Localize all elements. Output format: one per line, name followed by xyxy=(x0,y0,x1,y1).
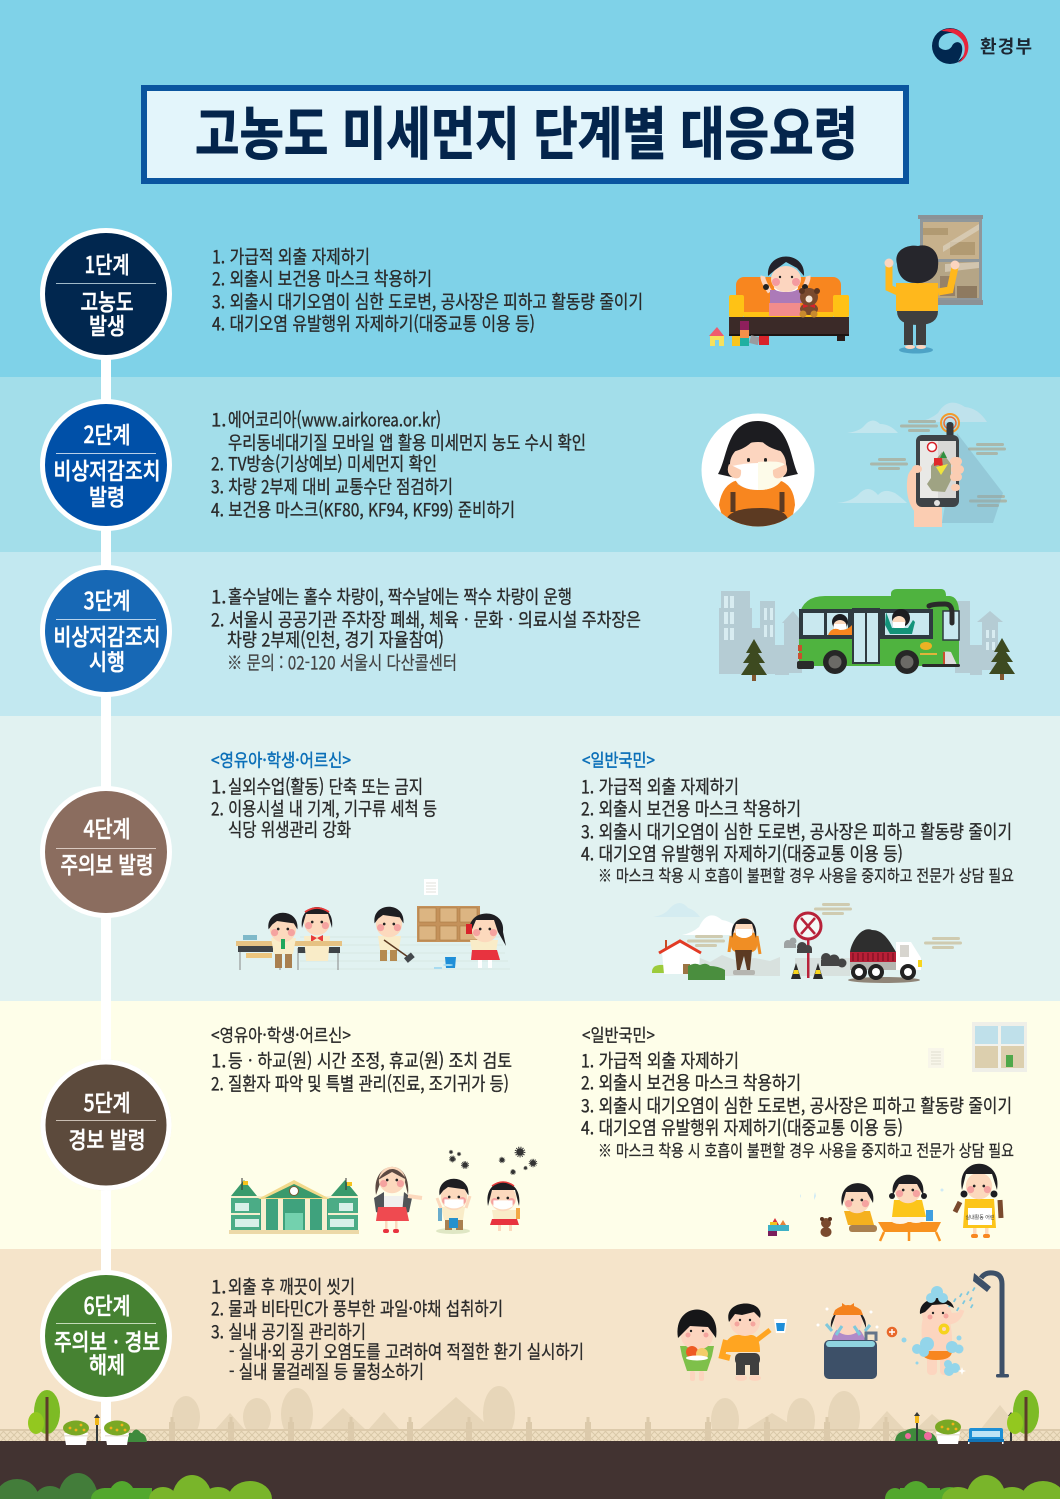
illustration: girl wearing mask in circle xyxy=(702,414,814,530)
stage 6 text: 외출 후 깨끗이 씻기 xyxy=(228,1274,355,1300)
badge: stage 4: 주의보 발령 xyxy=(60,846,154,880)
stage 2 text: 3. 차량 2부제 대비 교통수단 점검하기 xyxy=(211,474,453,500)
stage 5 text: general public: 1. 가급적 외출 자제하기 xyxy=(581,1048,739,1074)
stage 4 text: vulnerable groups xyxy=(211,748,437,843)
stage 4 text: general public: 1. 가급적 외출 자제하기 xyxy=(581,774,739,800)
stage 4 text: vulnerable groups: 1. xyxy=(211,774,226,800)
stage 5 text: general public: 2. 외출시 보건용 마스크 착용하기 xyxy=(581,1070,801,1096)
footer decorations: right bench, trees and planters xyxy=(895,1390,1039,1444)
stage 3 text: 홀수날에는 홀수 차량이, 짝수날에는 짝수 차량이 운행 xyxy=(228,584,572,610)
badge: stage 2: 비상저감조치 xyxy=(54,452,160,486)
badge: stage 1: 고농도 xyxy=(80,283,134,317)
stage 2 text: 에어코리아(www.airkorea.or.kr) xyxy=(228,407,441,433)
footer: park scenery xyxy=(0,1386,1060,1499)
logo: Ministry of Environment xyxy=(932,28,1032,64)
stage 6 text: 1. xyxy=(211,1274,226,1300)
title: 고농도 미세먼지 단계별 대응요령 xyxy=(195,89,858,171)
stage 4 text: general public: <일반국민> xyxy=(582,748,655,773)
badge: stage 1: 1단계 xyxy=(84,246,130,280)
illustration: phone with air quality map xyxy=(837,403,1007,527)
badge: stage 4: 4단계 xyxy=(84,810,130,844)
badge: stage 3: 비상저감조치 xyxy=(54,618,160,652)
badge: stage 6 xyxy=(40,1270,172,1402)
stage 5 text: vulnerable groups: 1. xyxy=(211,1048,226,1074)
stage 1 text: 2. 외출시 보건용 마스크 착용하기 xyxy=(212,266,432,292)
stage 4 text: vulnerable groups: 식당 위생관리 강화 xyxy=(228,817,351,843)
stage 6 text: - 실내·외 공기 오염도를 고려하여 적절한 환기 실시하기 xyxy=(229,1339,584,1365)
stage 2 text: 1. xyxy=(211,407,226,433)
illustration: masked children and fine dust xyxy=(436,1147,537,1234)
footer decorations: left trees and planters xyxy=(28,1390,147,1445)
badge: stage 6: 6단계 xyxy=(84,1287,130,1321)
stage 3 text xyxy=(211,584,641,676)
illustration: green bus with city xyxy=(719,589,1015,681)
badge: stage 6: 해제 xyxy=(89,1346,125,1380)
illustration: window and notice xyxy=(928,1022,1027,1072)
stage 1 text: 4. 대기오염 유발행위 자제하기(대중교통 이용 등) xyxy=(212,311,535,337)
badge: stage 2 xyxy=(42,402,170,528)
stage 5 text: vulnerable groups: 등ㆍ하교(원) 시간 조정, 휴교(원) 조치 검토 xyxy=(228,1048,512,1074)
stage 5 text: vulnerable groups: <영유아·학생·어르신> xyxy=(211,1023,351,1048)
illustration: students cleaning classroom xyxy=(236,879,510,970)
illustration: children indoors with caregiver: 실내활동 어린 xyxy=(965,1214,995,1221)
stage 5 text: general public: 4. 대기오염 유발행위 자제하기(대중교통 이용 등) xyxy=(581,1115,903,1141)
illustration: washing at sink xyxy=(816,1303,878,1379)
stage 6 text: 2. 물과 비타민C가 풍부한 과일·야채 섭취하기 xyxy=(211,1296,503,1322)
badge: stage 6: 주의보ㆍ경보 xyxy=(54,1323,160,1357)
stage 6 text: 3. 실내 공기질 관리하기 xyxy=(211,1319,366,1345)
timeline connector xyxy=(101,350,111,1441)
stage 2 text xyxy=(211,407,586,523)
illustration: children indoors with caregiver xyxy=(768,1164,1001,1241)
stage 3 text: 2. 서울시 공공기관 주차장 폐쇄, 체육ㆍ문화ㆍ의료시설 주차장은 xyxy=(211,607,641,633)
stage 2 text: 2. TV방송(기상예보) 미세먼지 확인 xyxy=(211,451,437,477)
illustration: girl with fruit and man with water xyxy=(677,1303,787,1381)
badge: stage 3: 시행 xyxy=(89,643,125,677)
stage 3 text: ※ 문의 : 02-120 서울시 다산콜센터 xyxy=(227,650,457,676)
badge: stage 2: 2단계 xyxy=(84,416,130,450)
badge: stage 5: 경보 발령 xyxy=(68,1121,146,1155)
badge: stage 3: 3단계 xyxy=(84,582,130,616)
footer decorations: bottom bushes xyxy=(0,1473,1060,1499)
stage 5 text: vulnerable groups xyxy=(211,1023,512,1097)
stage 2 text: 우리동네대기질 모바일 앱 활용 미세먼지 농도 수시 확인 xyxy=(228,430,586,456)
stage 5 text: general public: <일반국민> xyxy=(582,1023,655,1048)
stage 5 text: general public xyxy=(581,1023,1014,1162)
stage 4 text: general public xyxy=(581,748,1014,887)
badge: stage 1: 발생 xyxy=(89,307,125,341)
stage 1 text: 1. 가급적 외출 자제하기 xyxy=(212,244,370,270)
badge: stage 1 xyxy=(42,230,170,358)
icon: plus xyxy=(887,1327,897,1337)
badge: stage 3 xyxy=(42,568,170,694)
stage 5 text: vulnerable groups: 2. 질환자 파악 및 특별 관리(진료, 조기귀가 등) xyxy=(211,1071,509,1097)
logo: Ministry of Environment: 환경부 xyxy=(980,33,1032,59)
stage 1 text xyxy=(212,244,643,337)
stage 4 text: vulnerable groups: <영유아·학생·어르신> xyxy=(211,748,351,773)
stage 2 text: 4. 보건용 마스크(KF80, KF94, KF99) 준비하기 xyxy=(211,497,515,523)
stage 6 text xyxy=(211,1274,584,1385)
badge: stage 5 xyxy=(40,1060,172,1190)
stage 3 text: 1. xyxy=(211,584,226,610)
badge: stage 2: 발령 xyxy=(89,478,125,512)
stage 4 text: general public: 4. 대기오염 유발행위 자제하기(대중교통 이용 등) xyxy=(581,841,903,867)
illustration: person at window xyxy=(884,215,983,354)
stage 6 text: - 실내 물걸레질 등 물청소하기 xyxy=(229,1359,424,1385)
illustration: school building xyxy=(229,1178,359,1234)
illustration: girl on sofa with toys xyxy=(709,256,849,346)
illustration: teacher xyxy=(374,1167,422,1233)
illustration: boy in shower xyxy=(902,1273,1009,1378)
badge: stage 4 xyxy=(40,786,172,918)
stage 1 text: 3. 외출시 대기오염이 심한 도로변, 공사장은 피하고 활동량 줄이기 xyxy=(212,289,643,315)
stage 3 text: 차량 2부제(인천, 경기 자율참여) xyxy=(227,627,444,653)
stage 4 text: vulnerable groups: 실외수업(활동) 단축 또는 금지 xyxy=(228,774,423,800)
stage 4 text: general public: 2. 외출시 보건용 마스크 착용하기 xyxy=(581,796,801,822)
illustration: public, no-burning sign and truck xyxy=(652,903,962,983)
badge: stage 5: 5단계 xyxy=(84,1084,130,1118)
stage 4 text: vulnerable groups: 2. 이용시설 내 기계, 기구류 세척 등 xyxy=(211,796,437,822)
